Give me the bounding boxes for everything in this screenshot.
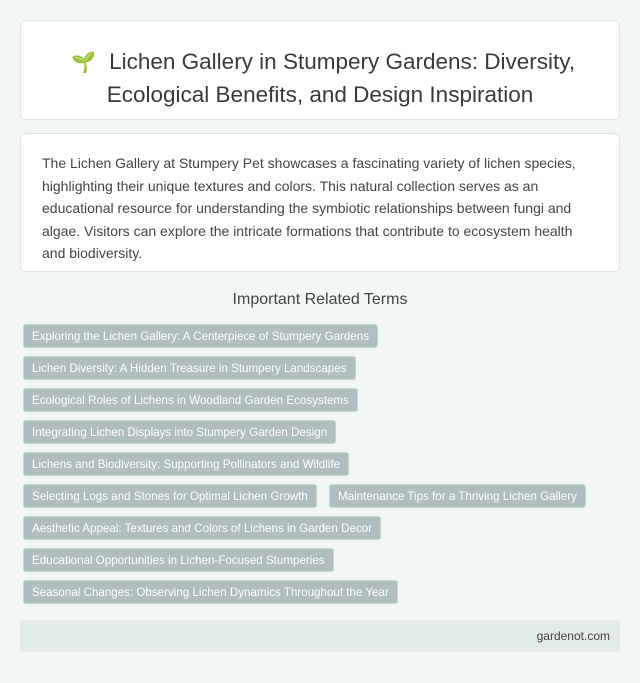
tags: Seasonal Changes: Observing Lichen Dynamics Throughout the Year [32,586,389,599]
description text: The Lichen Gallery at Stumpery Pet showcases a fascinating variety of lichen species, highlighting their unique textures and colors. This natural collection serves as an educational resource for understanding the symbiotic relationships between fungi and algae. Visitors can explore the intricate formations that contribute to ecosystem health and biodiversity. [42,155,576,261]
footer: gardenot.com [537,629,610,643]
title: Lichen Gallery in Stumpery Gardens: Diversity, [109,49,575,74]
footer [20,620,620,652]
header card [20,20,620,120]
tags: Lichens and Biodiversity: Supporting Pollinators and Wildlife [32,458,340,471]
tags: Ecological Roles of Lichens in Woodland Garden Ecosystems [32,394,349,407]
tags: Educational Opportunities in Lichen-Focused Stumperies [32,554,325,567]
tags: Aesthetic Appeal: Textures and Colors of Lichens in Garden Decor [32,522,372,535]
tags: Integrating Lichen Displays into Stumpery Garden Design [32,426,327,439]
title: Ecological Benefits, and Design Inspiration [107,82,533,107]
tags: Lichen Diversity: A Hidden Treasure in Stumpery Landscapes [32,362,346,375]
tags: Exploring the Lichen Gallery: A Centerpiece of Stumpery Gardens [32,330,369,343]
description card [20,133,620,272]
section heading: Important Related Terms [233,291,407,308]
tags: Selecting Logs and Stones for Optimal Lichen Growth [32,490,308,503]
tags: Maintenance Tips for a Thriving Lichen Gallery [338,490,577,503]
title [71,49,575,107]
icon: seedling: 🌱 [71,52,96,74]
